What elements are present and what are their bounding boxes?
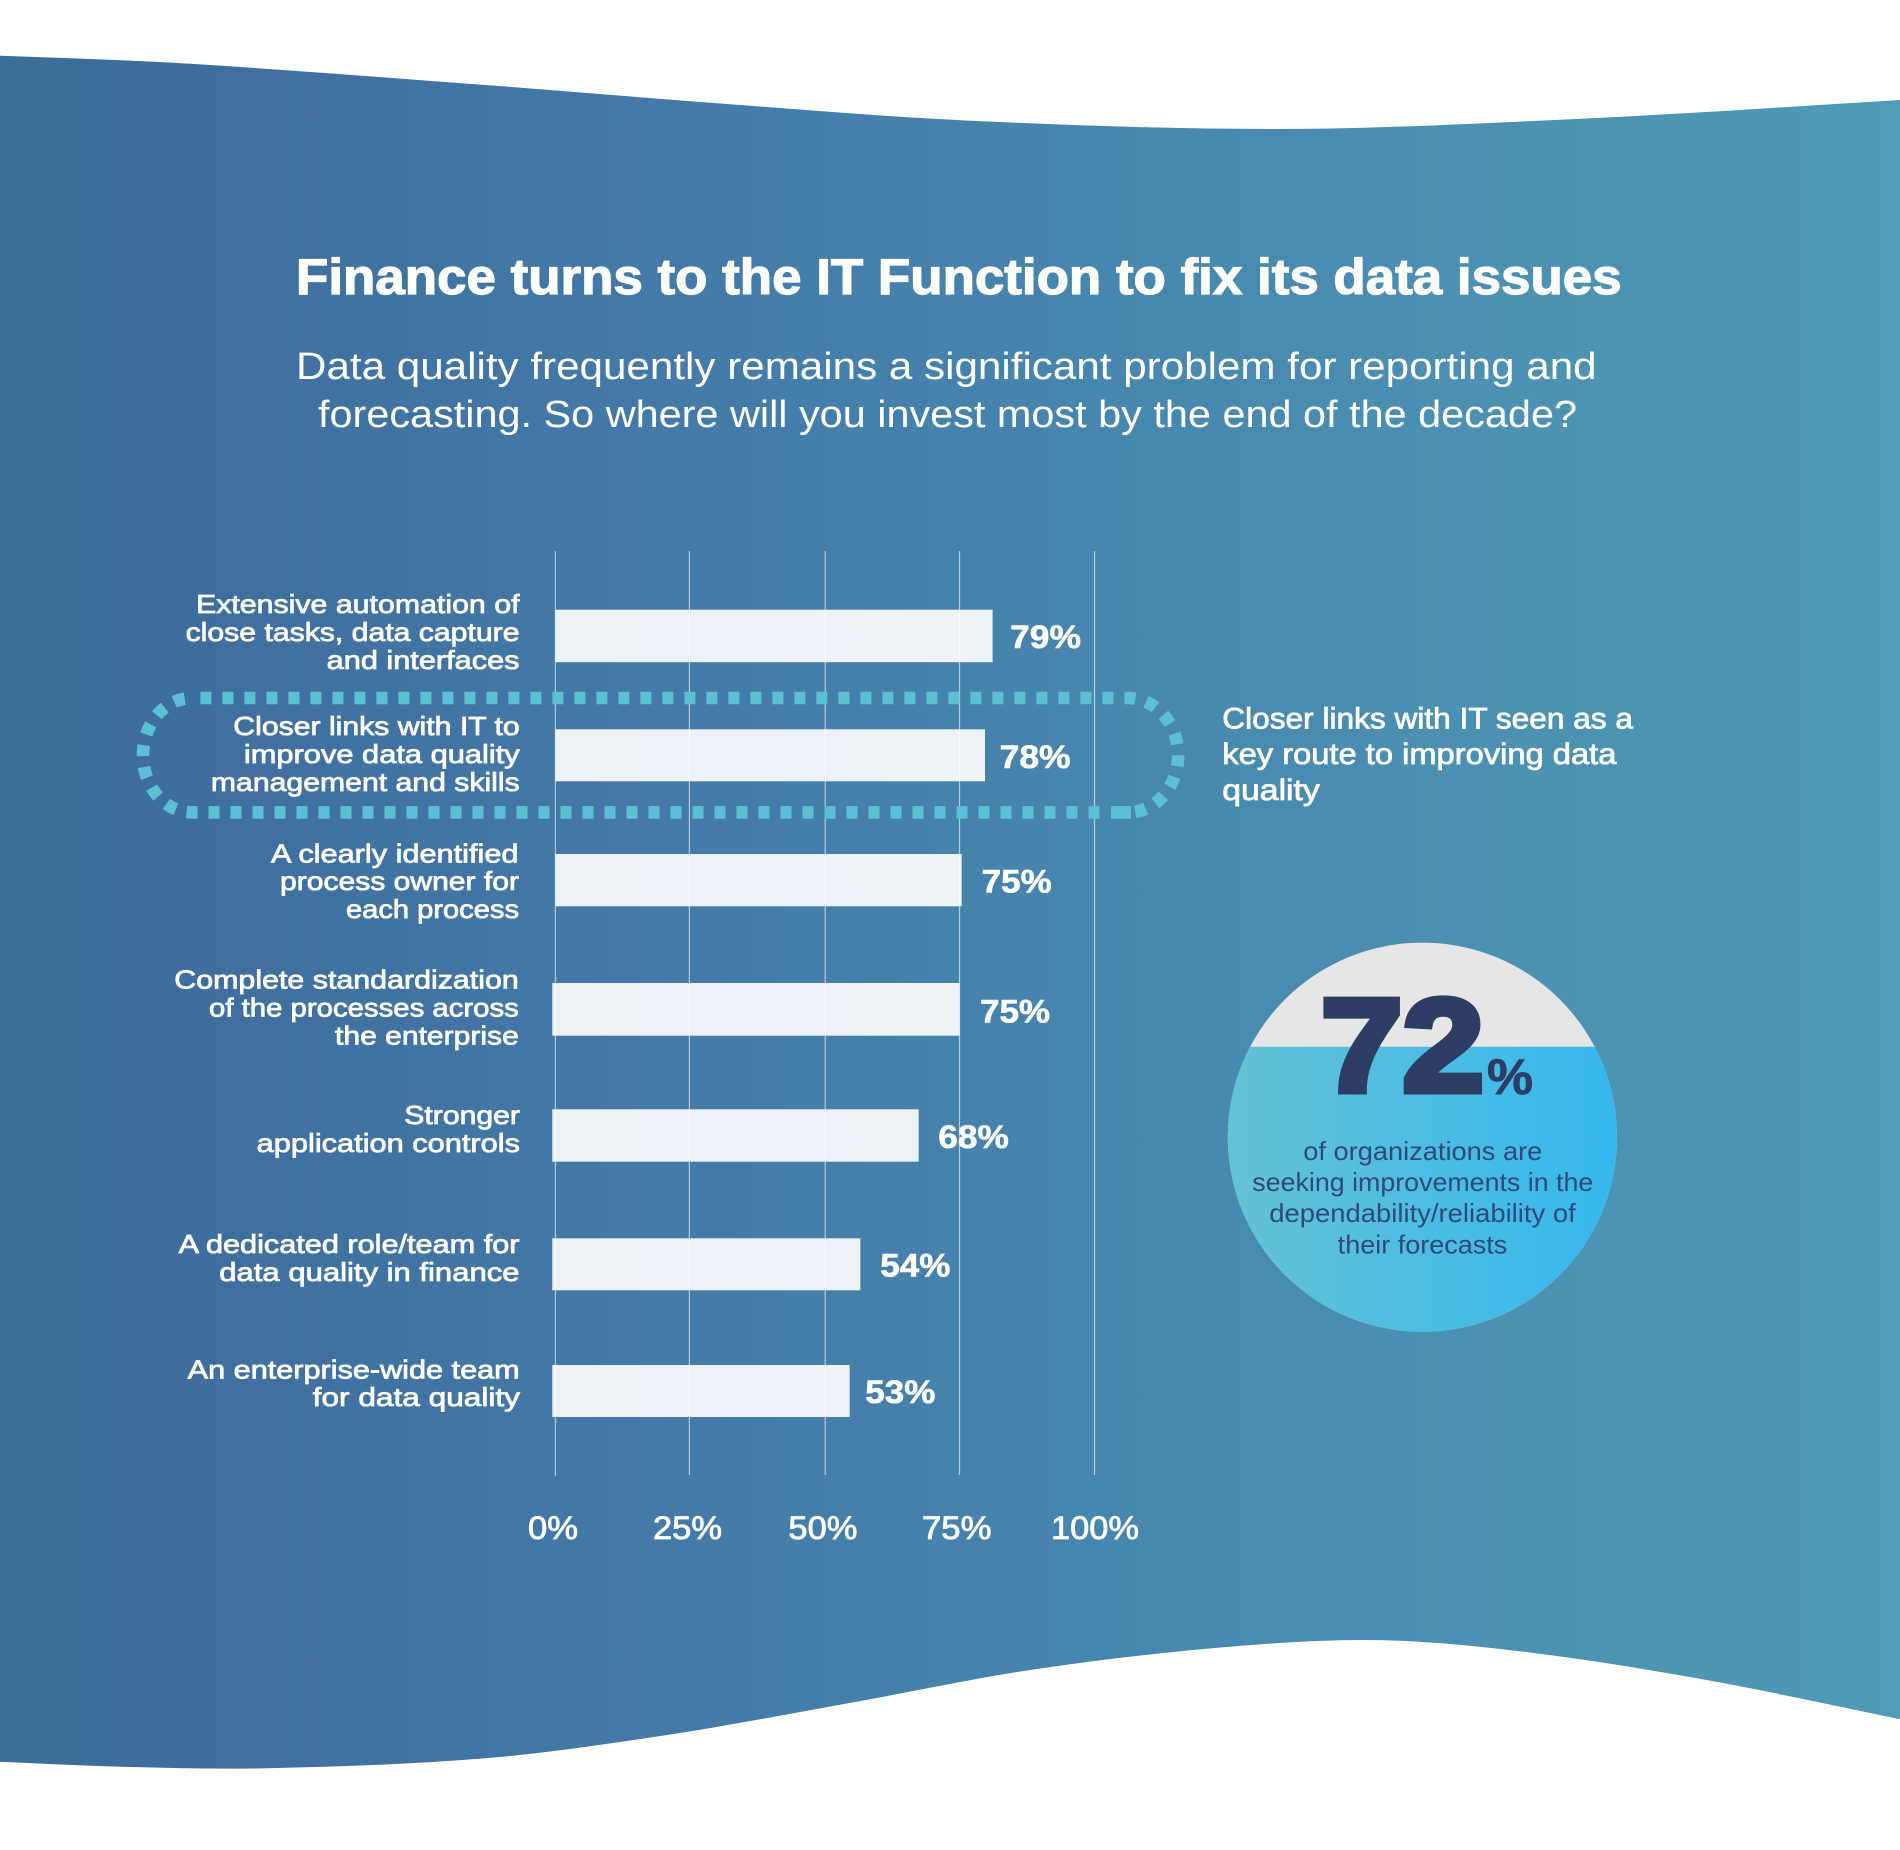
category labels: Stronger: [404, 1100, 520, 1130]
bar value labels: [865, 619, 1081, 1410]
x axis labels: 100%: [1051, 1510, 1139, 1546]
category labels: Extensive automation of: [196, 589, 520, 619]
category labels: Closer links with IT to: [233, 711, 520, 741]
stat percent sign: %: [1487, 1049, 1533, 1105]
category labels: [174, 589, 520, 1412]
bar value labels: 53%: [865, 1374, 935, 1410]
category labels: of the processes across: [209, 993, 519, 1023]
category labels: each process: [346, 894, 519, 924]
category labels: Complete standardization: [174, 965, 519, 995]
stat description: dependability/reliability of: [1269, 1198, 1577, 1228]
callout text: [1222, 702, 1634, 807]
chart grid lines: [555, 551, 1094, 1476]
category labels: close tasks, data capture: [186, 617, 520, 647]
callout text: key route to improving data: [1222, 738, 1617, 771]
category labels: data quality in finance: [219, 1257, 520, 1287]
bar value labels: 54%: [880, 1248, 950, 1284]
category labels: process owner for: [280, 866, 519, 896]
bar value labels: 75%: [982, 864, 1052, 900]
callout text: Closer links with IT seen as a: [1222, 702, 1634, 735]
subtitle: Data quality frequently remains a significant problem for reporting and: [296, 346, 1597, 388]
category labels: for data quality: [313, 1382, 520, 1412]
stat circle: 72%: [1228, 943, 1617, 1332]
x axis labels: 75%: [922, 1510, 992, 1546]
callout text: quality: [1222, 774, 1320, 807]
category labels: and interfaces: [327, 645, 520, 675]
bar value labels: 79%: [1010, 619, 1081, 655]
title: Finance turns to the IT Function to fix its data issues: [296, 249, 1622, 305]
subtitle: [296, 346, 1597, 436]
x axis labels: 0%: [528, 1510, 578, 1546]
stat description: their forecasts: [1338, 1229, 1507, 1259]
bar value labels: 75%: [980, 994, 1050, 1030]
category labels: management and skills: [211, 767, 520, 797]
x axis labels: 50%: [788, 1510, 857, 1546]
category labels: A dedicated role/team for: [179, 1229, 520, 1259]
bar value labels: 68%: [938, 1119, 1009, 1155]
x axis labels: [528, 1510, 1139, 1546]
category labels: An enterprise-wide team: [188, 1354, 520, 1384]
category labels: application controls: [257, 1128, 520, 1158]
bar value labels: 78%: [1000, 739, 1071, 775]
stat description: seeking improvements in the: [1252, 1167, 1593, 1197]
dotted highlight loop: [143, 698, 1178, 812]
category labels: A clearly identified: [271, 838, 518, 868]
stat description: [1252, 1136, 1593, 1259]
bar chart: [552, 610, 993, 1417]
stat description: of organizations are: [1303, 1136, 1542, 1166]
subtitle: forecasting. So where will you invest most by the end of the decade?: [318, 394, 1577, 436]
category labels: improve data quality: [244, 739, 520, 769]
stat number: 72: [1321, 972, 1484, 1119]
category labels: the enterprise: [335, 1021, 519, 1051]
x axis labels: 25%: [653, 1510, 722, 1546]
